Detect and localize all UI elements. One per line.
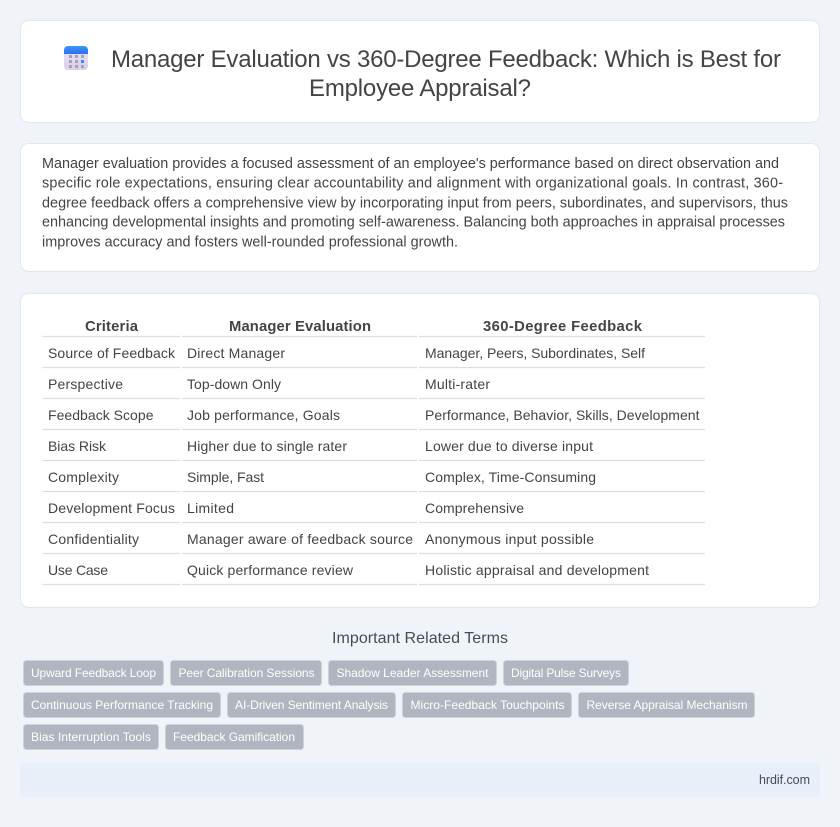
tag: AI-Driven Sentiment Analysis (235, 698, 388, 712)
tag (24, 692, 220, 718)
tag: Reverse Appraisal Mechanism (586, 698, 748, 712)
tag: Shadow Leader Assessment (336, 666, 489, 680)
title (111, 46, 781, 102)
table row: bias risk: Lower due to diverse input (425, 438, 593, 454)
table row: complexity: Complex, Time-Consuming (425, 469, 596, 485)
table row: use case: Quick performance review (187, 562, 354, 578)
table row: use case: Holistic appraisal and development (425, 562, 649, 578)
tag (170, 660, 322, 686)
footer: hrdif.com (759, 773, 810, 787)
table row: confidentiality: Confidentiality (48, 531, 139, 547)
table row: complexity: Complexity (48, 469, 119, 485)
icon: calendar (64, 46, 88, 70)
tag: Bias Interruption Tools (31, 730, 151, 744)
table row: development focus (48, 500, 524, 516)
table row: bias risk (48, 438, 593, 454)
table header: Criteria (85, 319, 139, 335)
table row: perspective (48, 376, 490, 392)
table row: use case (48, 562, 649, 578)
text block: summary: enhancing developmental insights and promoting self-awareness. Balancing both approaches in appraisal processes (42, 214, 785, 230)
table row: development focus: Development Focus (48, 500, 175, 516)
table row: feedback scope: Feedback Scope (48, 407, 154, 423)
panel: comparison table (20, 294, 820, 608)
tag: Feedback Gamification (173, 730, 295, 744)
table row: source of feedback: Manager, Peers, Subordinates, Self (425, 345, 645, 361)
table row: source of feedback (48, 345, 645, 361)
text block: summary (42, 156, 788, 250)
table row: confidentiality (48, 531, 594, 547)
heading: related terms: Important Related Terms (332, 630, 508, 647)
table row: feedback scope: Job performance, Goals (187, 407, 340, 423)
tag: Upward Feedback Loop (31, 666, 156, 680)
table row: use case: Use Case (48, 562, 108, 578)
title: Manager Evaluation vs 360-Degree Feedback: Which is Best for (111, 46, 781, 73)
tag (24, 724, 158, 750)
tag: Micro-Feedback Touchpoints (410, 698, 564, 712)
table row: perspective: Multi-rater (425, 376, 490, 392)
tag (578, 692, 754, 718)
footer (20, 763, 820, 797)
text block: summary: Manager evaluation provides a focused assessment of an employee's performance based on direct observation and (42, 156, 779, 172)
tags: related terms (24, 660, 754, 750)
panel: summary text (20, 144, 820, 272)
text block: summary: degree feedback offers a comprehensive view by incorporating input from peers, subordinates, and supervisors, thus (42, 196, 788, 212)
panel: header (20, 20, 820, 122)
tag: Continuous Performance Tracking (31, 698, 213, 712)
table row: development focus: Comprehensive (425, 500, 524, 516)
text block: summary: specific role expectations, ensuring clear accountability and alignment with organizational goals. In contrast, 360- (42, 176, 783, 192)
tag (228, 692, 396, 718)
table row: perspective: Perspective (48, 376, 123, 392)
tag (402, 692, 572, 718)
table row: source of feedback: Source of Feedback (48, 345, 176, 361)
tag (24, 660, 164, 686)
text block: summary: improves accuracy and fosters well-rounded professional growth. (42, 234, 458, 250)
title: Employee Appraisal? (309, 75, 531, 102)
tag (166, 724, 304, 750)
table row: bias risk: Bias Risk (48, 438, 107, 454)
table row: perspective: Top-down Only (187, 376, 281, 392)
table row: confidentiality: Anonymous input possible (425, 531, 594, 547)
table header: Manager Evaluation (229, 319, 371, 335)
table row: development focus: Limited (187, 500, 234, 516)
table row: source of feedback: Direct Manager (187, 345, 285, 361)
tag (328, 660, 496, 686)
table row: complexity: Simple, Fast (187, 469, 264, 485)
tag: Peer Calibration Sessions (178, 666, 314, 680)
table row: bias risk: Higher due to single rater (187, 438, 347, 454)
table header (85, 319, 643, 335)
table row: feedback scope: Performance, Behavior, Skills, Development (425, 407, 700, 423)
table row: confidentiality: Manager aware of feedback source (187, 531, 413, 547)
table header: 360-Degree Feedback (483, 319, 643, 335)
tag (504, 660, 628, 686)
tag: Digital Pulse Surveys (511, 666, 621, 680)
table row: feedback scope (48, 407, 700, 423)
table row: complexity (48, 469, 596, 485)
